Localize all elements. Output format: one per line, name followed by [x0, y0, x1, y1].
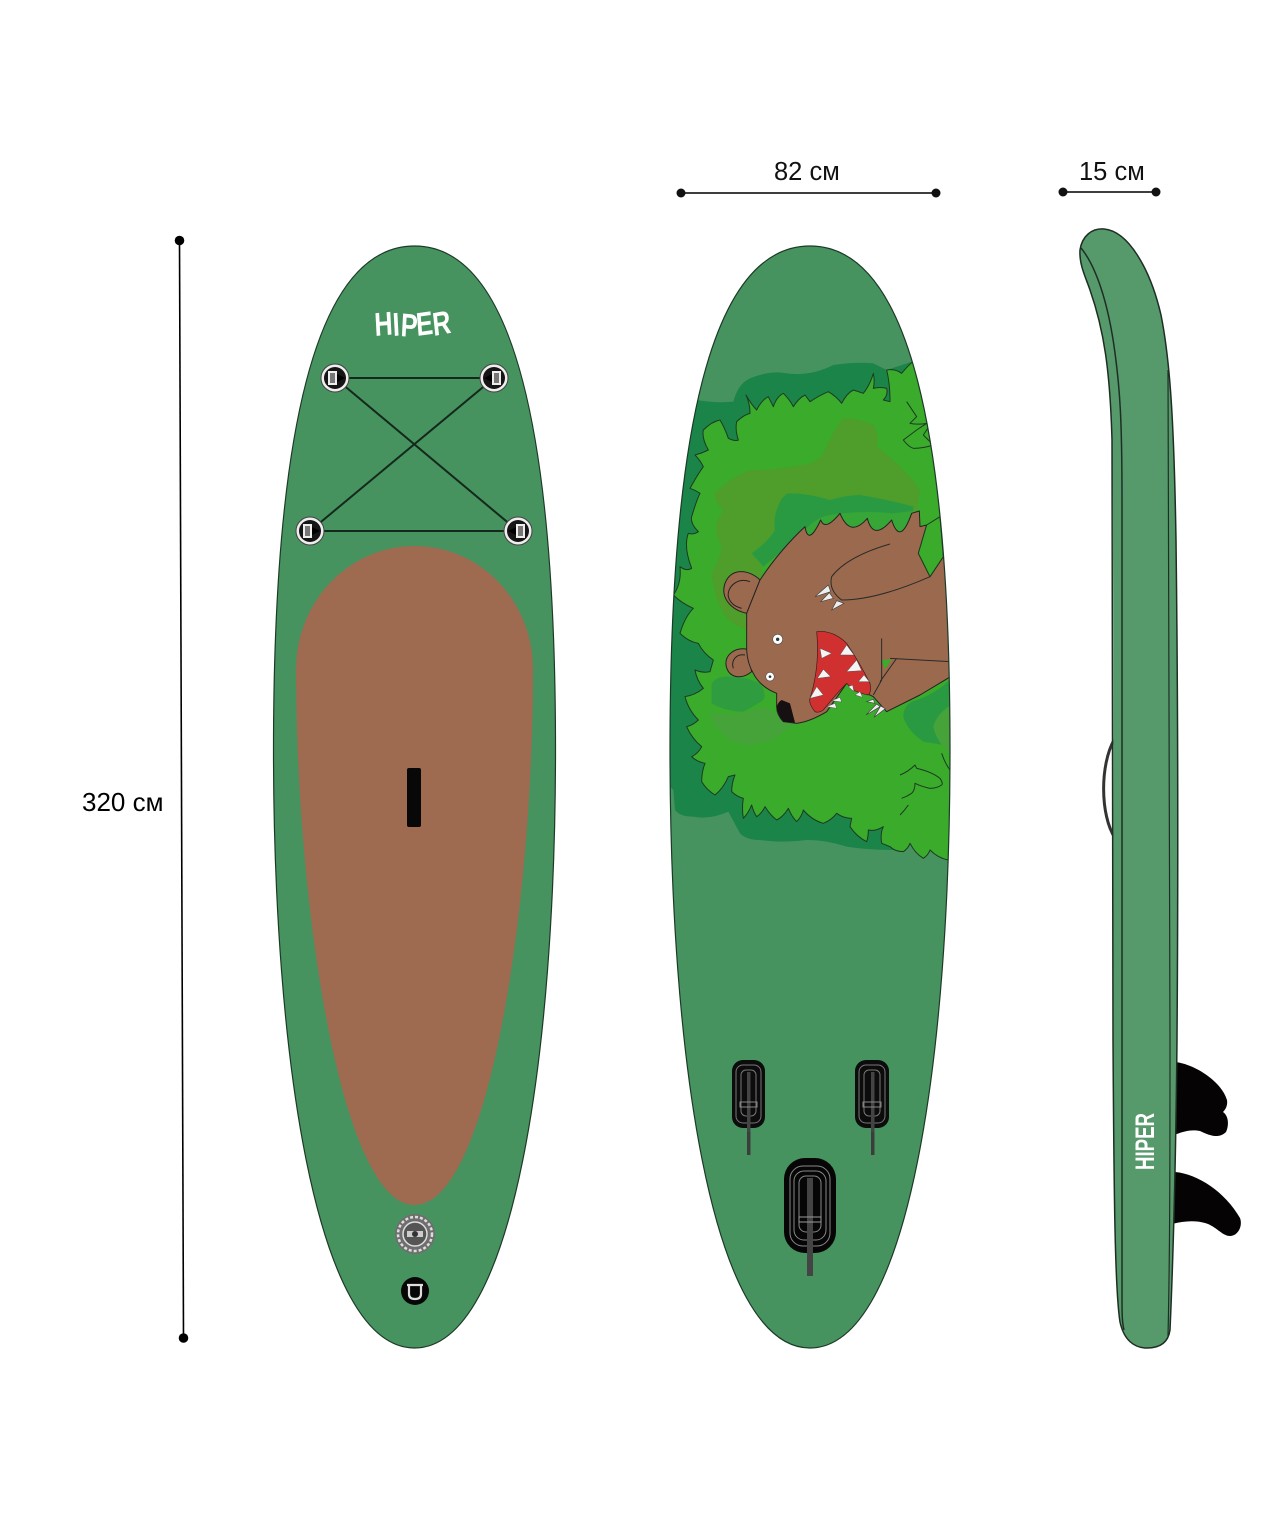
D-ring: top right: [480, 364, 508, 392]
dimension: length 320 cm: [82, 236, 188, 1343]
board outline: [274, 246, 556, 1348]
handle arc: [1104, 740, 1115, 838]
mouth: [810, 631, 871, 712]
small gap in foliage: [882, 659, 892, 669]
carry handle: [407, 768, 421, 827]
fin box: left: [732, 1060, 765, 1155]
olive shade: [712, 418, 920, 630]
leaf contour lines: [900, 402, 950, 815]
upper claws: [815, 585, 844, 610]
upper ear: [724, 572, 760, 613]
board edge line: [670, 246, 950, 1348]
fin box: center: [784, 1158, 836, 1276]
bear body: [747, 511, 953, 723]
board: side view: [1080, 229, 1241, 1348]
side outline: [1080, 229, 1178, 1348]
dimension: length 320 cm: 320 см: [82, 787, 163, 817]
bear and foliage artwork: [667, 360, 960, 863]
teeth: [810, 645, 869, 708]
nose: [777, 700, 795, 723]
foreground leaf: [918, 517, 943, 577]
bright band above bear: [806, 510, 920, 535]
rear fin lower: [1172, 1172, 1241, 1236]
eye lower: [766, 672, 774, 681]
logo: HIPER: [373, 304, 453, 344]
leash ring: [401, 1277, 429, 1305]
lower left dark shade: [712, 677, 764, 712]
right shade: [904, 681, 949, 744]
lower claws: [866, 699, 885, 717]
foliage: [673, 360, 960, 863]
arm lines: [831, 544, 950, 695]
board: top view: [274, 246, 556, 1348]
fin box: right: [855, 1060, 889, 1155]
mid green shade: [752, 493, 913, 567]
bungee cords: [310, 378, 518, 531]
D-ring: bottom right: [504, 517, 532, 545]
D-ring: bottom left: [296, 517, 324, 545]
right light shade: [933, 706, 950, 753]
dimension: width 82 cm: 82 см: [774, 158, 840, 186]
inner rail line right: [1168, 370, 1170, 1336]
board: bottom view: [667, 246, 960, 1348]
inner rail line left: [1081, 248, 1124, 1330]
eye upper: [773, 634, 783, 644]
inflation valve: [395, 1214, 435, 1254]
D-ring: top left: [321, 364, 349, 392]
brown deck pad: [296, 546, 533, 1205]
lower left shade: [710, 707, 793, 744]
rear fin upper: [1174, 1062, 1228, 1136]
dimension: thickness 15 cm: 15 см: [1079, 158, 1145, 186]
dark green backdrop: [670, 362, 912, 850]
lower ear: [726, 649, 752, 677]
side logo: HIPER: [1130, 1113, 1160, 1170]
board outline: [670, 246, 950, 1348]
dimension: width 82 cm: [676, 158, 940, 198]
dimension: thickness 15 cm: [1058, 158, 1160, 196]
